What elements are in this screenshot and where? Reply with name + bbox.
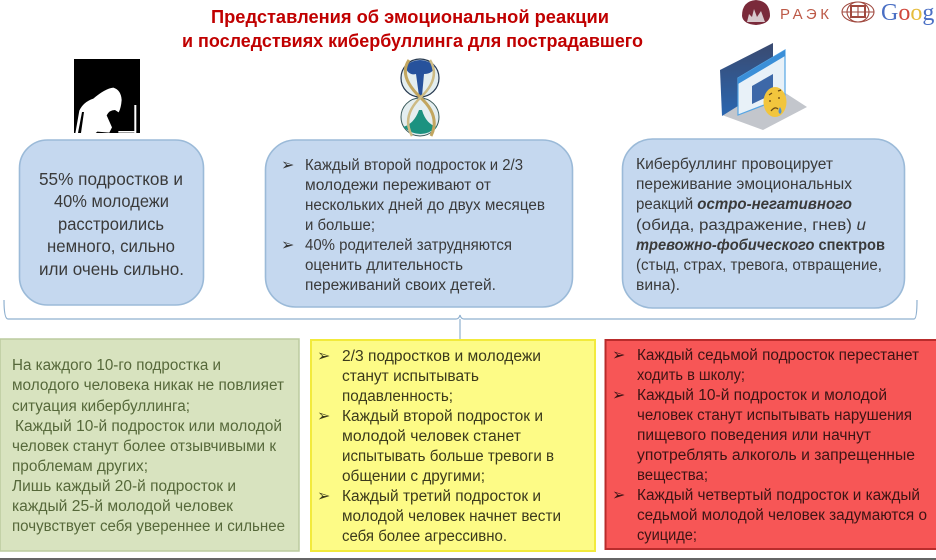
panel: moderate effects: Каждый третий подросток и	[342, 488, 541, 505]
panel: upset share: расстроились	[58, 214, 164, 234]
panel: emotional reactions: вина).	[636, 277, 680, 294]
panel: moderate effects: ➢	[317, 346, 330, 365]
panel: moderate effects: Каждый второй подросток и	[342, 408, 543, 425]
panel: upset share	[20, 140, 204, 305]
panel: positive and neutral effects: молодого человека никак не повлияет	[12, 377, 284, 394]
panel: upset share: или очень сильно.	[39, 259, 184, 279]
panel: upset share: 55% подростков и	[39, 169, 183, 189]
panel: severe effects: Каждый четвертый подросток и каждый	[637, 487, 920, 504]
panel: duration of feelings: оценить длительность	[305, 257, 463, 274]
panel: upset share: немного, сильно	[47, 236, 175, 256]
panel: severe effects: седьмой молодой человек задумаются о	[637, 507, 927, 524]
panel: moderate effects: 2/3 подростков и молодежи	[342, 348, 541, 365]
panel: duration of feelings	[266, 140, 572, 307]
panel: moderate effects: себя более агрессивно.	[342, 528, 507, 545]
panel: severe effects: ходить в школу;	[637, 367, 745, 384]
panel: moderate effects: общении с другими;	[342, 468, 485, 485]
panel: emotional reactions: тревожно-фобического спектров	[636, 237, 885, 254]
logo: globe emblem	[842, 2, 874, 22]
bracket connector	[4, 300, 917, 339]
logo: RAEK: РАЭК	[780, 6, 829, 23]
logo: university crest	[742, 0, 770, 25]
panel: severe effects: употреблять алкоголь и запрещенные	[637, 447, 915, 464]
panel: duration of feelings: переживаний своих детей.	[305, 277, 496, 294]
panel: positive and neutral effects: На каждого 10-го подростка и	[12, 357, 221, 374]
panel: moderate effects: молодой человек начнет вести	[342, 508, 561, 525]
title	[182, 7, 643, 51]
panel: positive and neutral effects: ситуация кибербуллинга;	[12, 398, 190, 415]
panel: duration of feelings: ➢	[281, 235, 294, 254]
panel: positive and neutral effects: проблемам других;	[12, 458, 148, 475]
panel: moderate effects: станут испытывать	[342, 368, 479, 385]
panel: severe effects: ➢	[612, 345, 625, 364]
icon: hourglass	[401, 59, 439, 136]
panel: duration of feelings: молодежи переживают от	[305, 177, 491, 194]
panel: severe effects: Каждый 10-й подросток и молодой	[637, 387, 887, 404]
panel: upset share: 40% молодежи	[54, 191, 169, 211]
panel: positive and neutral effects: почувствует себя увереннее и сильнее	[12, 518, 285, 535]
panel: severe effects: ➢	[612, 385, 625, 404]
panel: moderate effects	[311, 340, 595, 551]
panel: emotional reactions: переживание эмоциональных	[636, 176, 852, 193]
panel: moderate effects: ➢	[317, 486, 330, 505]
panel: emotional reactions: (стыд, страх, тревога, отвращение,	[636, 257, 882, 274]
panel: positive and neutral effects: каждый 25-й молодой человек	[12, 498, 233, 515]
panel: emotional reactions: (обида, раздражение, гнев) и	[636, 217, 866, 234]
panel: emotional reactions: реакций остро-негативного	[636, 196, 852, 213]
panel: moderate effects: подавленность;	[342, 388, 453, 405]
panel: severe effects: Каждый седьмой подросток перестанет	[637, 347, 919, 364]
panel: duration of feelings: и больше;	[305, 217, 375, 234]
logo: Google: Goog	[881, 0, 934, 26]
panel: severe effects: ➢	[612, 485, 625, 504]
panel: severe effects: суициде;	[637, 527, 697, 544]
panel: positive and neutral effects: человек станут более отзывчивыми к	[12, 438, 276, 455]
icon: sad silhouette	[74, 59, 140, 133]
panel: severe effects: человек станут испытывать нарушения	[637, 407, 912, 424]
panel: moderate effects: испытывать больше тревоги в	[342, 448, 554, 465]
panel: emotional reactions	[622, 139, 904, 308]
icon: laptop with sad emoji	[720, 43, 807, 130]
panel: moderate effects: ➢	[317, 406, 330, 425]
panel: severe effects: пищевого поведения или начнут	[637, 427, 871, 444]
panel: severe effects	[606, 340, 936, 549]
panel: positive and neutral effects: Каждый 10-й подросток или молодой	[15, 418, 282, 435]
panel: duration of feelings: нескольких дней до двух месяцев	[305, 197, 545, 214]
panel: moderate effects: молодой человек станет	[342, 428, 521, 445]
title: Представления об эмоциональной реакции	[211, 7, 609, 27]
logos	[742, 0, 934, 26]
panel: duration of feelings: ➢	[281, 155, 294, 174]
panel: duration of feelings: Каждый второй подросток и 2/3	[305, 157, 523, 174]
panel: positive and neutral effects	[0, 339, 299, 551]
title: и последствиях кибербуллинга для пострадавшего	[182, 31, 643, 51]
panel: emotional reactions: Кибербуллинг провоцирует	[636, 156, 833, 173]
panel: duration of feelings: 40% родителей затрудняются	[305, 237, 512, 254]
panel: positive and neutral effects: Лишь каждый 20-й подросток и	[12, 478, 236, 495]
panel: severe effects: вещества;	[637, 467, 708, 484]
